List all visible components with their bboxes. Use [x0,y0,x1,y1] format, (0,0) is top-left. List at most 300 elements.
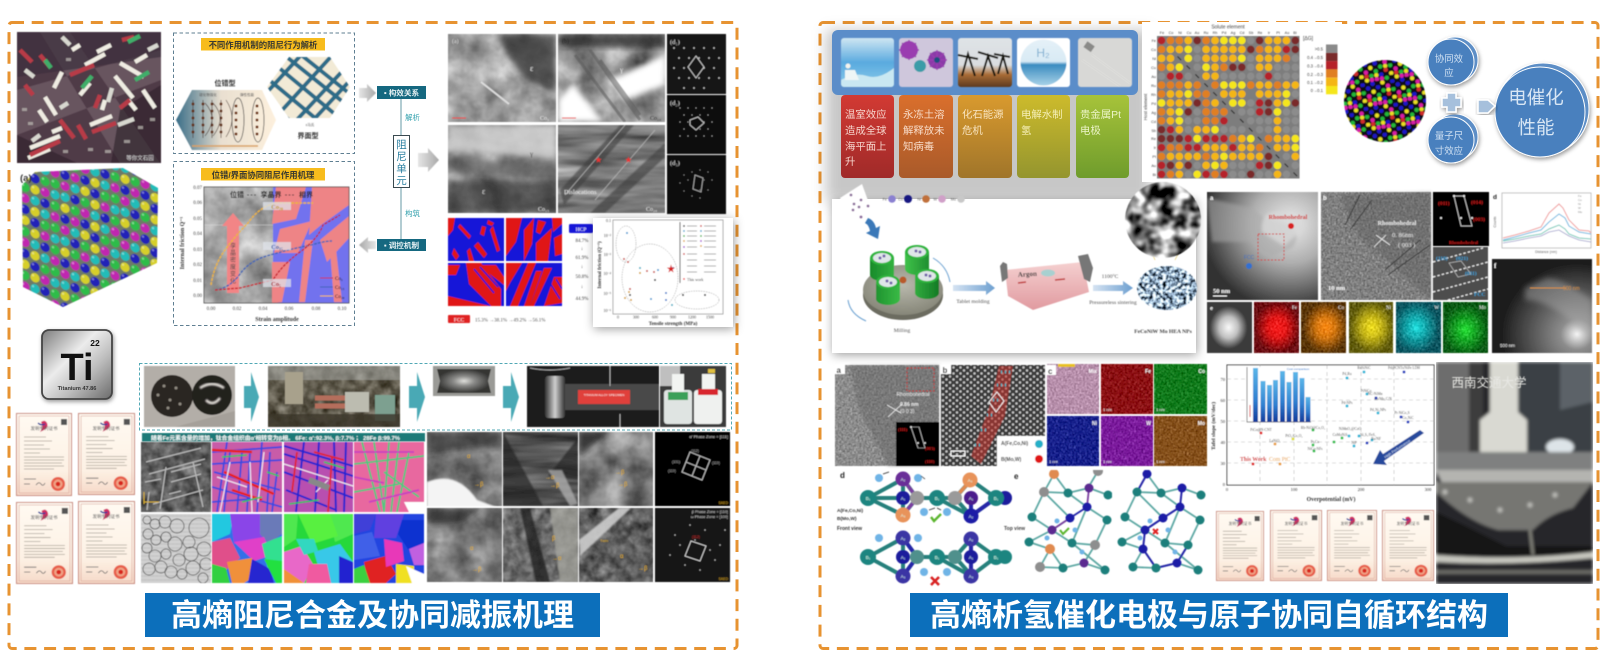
HRTEM b: Rhombohedral [1378,221,1417,227]
scatter chart: Tafel slope vs overpotential: 30 [1220,461,1226,466]
photo: hot rolling machine [268,366,400,427]
incorrect configuration: A₁ [901,555,906,560]
HRTEM a lower: (0 0 3) [900,409,915,415]
diagram: dislocation hexagon [176,78,276,150]
HCP legend: ↓ [581,247,583,252]
heatmap: segregation energy matrix: Ni [1152,57,1156,61]
SAED inset: (110) [925,459,935,464]
EBSD grains 2 [284,514,353,583]
heatmap legend: 0.4→0.5 [1307,55,1324,60]
HCP legend: 50.8% [576,275,588,280]
line chart: internal friction vs strain [180,186,349,323]
scatter chart: Tafel slope vs overpotential: PtNiCo [1361,389,1372,393]
TEM image 2 [503,432,578,506]
STEM f: 500 nm [1500,343,1515,348]
card: water electrolysis: 电解水制 [1021,108,1063,121]
diagram: interface hexagon [267,56,350,140]
panel label a: (a) [20,173,32,184]
heatmap: segregation energy matrix: Fe [1152,39,1156,43]
card: fossil energy: 危机 [962,124,983,137]
diffraction d2: (d₂) [670,100,680,107]
mapping W: W [1146,421,1151,427]
HAADF b lower: b [942,366,948,375]
caption bar: Fe content and phase [142,433,425,442]
EDS Ni: Ni [1386,306,1392,311]
diagram d: front view molecular structures: d [840,471,845,480]
line chart: internal friction vs strain: 晶 [230,250,236,257]
image: hydrogen globe: H₂ [1036,46,1050,60]
HRTEM a lower: 0.86 nm [900,402,919,408]
HCP legend: 84.7% [576,239,588,244]
scatter chart: Tafel slope vs overpotential: 50 [1220,419,1226,424]
certificate 6: 发明专利证书 [1285,521,1308,526]
card: fossil energy: 化石能源 [962,108,1004,121]
photo: traffic jam [17,32,161,163]
certificate 2: 发明专利证书 [92,425,120,432]
scatter chart: friction vs tensile strength: ★ [666,264,676,274]
SAED c top: (003) [1473,216,1485,223]
scatter chart: friction vs tensile strength: 10⁻⁶ [603,308,612,313]
SAED 1: (112) [691,449,699,453]
scatter chart: Tafel slope vs overpotential: Overpotential (mV) [1307,496,1355,503]
line chart: internal friction vs strain: 0.08 [312,307,321,312]
heatmap: segregation energy matrix: Pt [1152,155,1157,159]
sintered porous disc: FeCoNiW Mo HEA NPs [1134,329,1193,335]
sintered porous disc [1134,250,1197,335]
arrow: process step 1 [244,372,259,422]
incorrect configuration: A₁ [969,555,974,560]
patent certificates left [16,413,134,584]
HRTEM b: b [1323,196,1327,202]
certificate 3 [17,502,72,584]
bubble: synergy effect [1428,37,1478,85]
certificate 2 [79,413,134,495]
scatter chart: Tafel slope vs overpotential: 60 [1220,398,1226,403]
scatter chart: Tafel slope vs overpotential: This Work [1240,457,1267,463]
heading: damping behaviour: 不同作用机制的阻尼行为解析 [209,40,318,50]
heatmap: segregation energy matrix: Re [1151,137,1156,141]
line chart: internal friction vs strain: 0.01 [193,279,202,284]
micrograph d: ★ [595,156,602,164]
ball mill [848,245,950,334]
incorrect configuration: B₁ [994,555,999,560]
arrow: sintering: Pressureless sintering [1089,300,1137,306]
card: precious Pt: 贵金属Pt [1080,108,1121,121]
SEM porous circle [1125,182,1201,258]
SAED inset: (003) [925,446,935,451]
powder packet [840,184,870,221]
phase map 4 [506,263,562,306]
heatmap legend: 0.3→0.4 [1307,64,1324,68]
card: greenhouse effect: 升 [845,156,855,168]
heatmap legend: 0→0.1 [1311,88,1324,93]
scatter chart: Tafel slope vs overpotential: Pt₃Cu [1311,440,1319,444]
photo: polished plate [433,366,495,396]
panel: synergy to electrocatalysis [1428,37,1589,163]
line chart: internal friction vs strain: 0.02 [233,307,242,312]
SAED 2 [655,508,730,582]
diagram: interface hexagon: 界面型 [298,131,318,140]
heatmap: segregation energy matrix [1143,24,1338,178]
scatter chart: Tafel slope vs overpotential: NiP [1351,441,1357,445]
heatmap: segregation energy matrix: Cd [1151,120,1156,124]
heatmap: segregation energy matrix: Bi [1153,173,1156,177]
line chart: internal friction vs strain: 0.10 [338,307,347,312]
mapping W: 1 nm [1103,459,1113,464]
arrow: from control mechanism [359,237,376,253]
EBSD and SEM microstructure grid [141,432,730,583]
micrograph b [558,34,665,122]
heatmap: segregation energy matrix: Ag [1151,111,1156,115]
correct configuration: A₂ [969,514,974,519]
diagram d: front view molecular structures: A(Fe,Co,Ni) [837,508,864,514]
mapping Fe: 1 nm [1103,407,1113,412]
EDS e HAADF [1207,302,1252,353]
line scan d: W [1578,206,1581,210]
EDS e HAADF: e [1210,306,1213,312]
diagram d: front view molecular structures: B(Mo,W) [837,516,857,522]
icon: titanium element tile: Ti [60,347,94,389]
SAED 1: α′ Phase Zone = [111] [689,434,728,439]
scatter chart: Tafel slope vs overpotential: Ru/NF [1371,437,1381,441]
certificate 7: 发明专利证书 [1341,521,1364,526]
scatter chart: Tafel slope vs overpotential: RuSiNiC [1357,366,1371,370]
heatmap: segregation energy matrix: Re [1258,31,1262,35]
diagram e: top view lattices: Top view [1004,526,1025,532]
bubble: electrocatalytic performance: 性能 [1517,117,1555,138]
mapping Ni: Ni [1092,421,1098,427]
mapping Fe: Fe [1145,369,1151,375]
FCC legend: FCC [454,318,465,324]
line chart: internal friction vs strain: 0.06 [285,307,294,312]
mapping Mo [1154,416,1207,466]
arrow: sintering: 1100°C [1102,273,1119,280]
heatmap: segregation energy matrix: Sb [1151,129,1156,133]
SAED c top: (011) [1438,200,1450,207]
correct configuration: A₃ [901,513,906,518]
arrow: tablet molding [953,281,995,305]
line scan d: Ni [1578,202,1581,206]
micrograph c: Co₁₅ [538,207,549,213]
heading: synergy mechanism [201,168,325,180]
incorrect configuration: A₂ [969,537,974,542]
scatter chart: Tafel slope vs overpotential: Co/Mo₂C/N [1374,397,1392,401]
scatter chart: friction vs tensile strength: 600 [652,314,658,320]
line scan d: d [1493,194,1497,201]
TEM micrographs grid [448,34,726,214]
heatmap: segregation energy matrix: Cu [1187,31,1191,35]
line chart: internal friction vs strain: 0.07 [193,186,202,191]
heatmap legend: >0.5 [1315,46,1324,52]
label: structure-property: ▪ 构效关系 [384,88,419,98]
HCP legend: 44.9% [576,297,588,302]
line scan d: Counts [1493,216,1497,228]
image: oil pumps [958,38,1012,87]
HCP legend: ↓ [581,265,583,270]
line chart: internal friction vs strain: Co₁₅ [335,286,345,291]
scatter chart: Tafel slope vs overpotential: 70 [1220,377,1226,382]
heatmap: segregation energy matrix: Co [1169,31,1173,35]
card: permafrost: 知病毒 [903,140,934,153]
icon: plus [1442,93,1461,112]
TEM image 2: →β [550,483,560,489]
scatter chart: friction vs tensile strength: 900 [670,314,676,320]
TEM image 5: →α [552,556,562,562]
scatter chart: Tafel slope vs overpotential: 40 [1220,440,1226,445]
heatmap: segregation energy matrix: Ni [1178,31,1182,35]
SAED c bottom: (021) [1456,255,1468,262]
EDS W: W [1434,306,1439,311]
STEM f [1492,259,1592,353]
STEM f: f [1494,262,1497,270]
mapping mix: c [1048,367,1053,376]
scatter chart: friction vs tensile strength: 10⁻⁵ [603,291,612,296]
heatmap: segregation energy matrix: Sb [1249,31,1253,35]
scatter chart: friction vs tensile strength: 1200 [688,314,696,320]
micrograph a: Co₅ [540,116,549,122]
image: iceberg [841,38,894,87]
image: hydrogen globe [1017,38,1070,87]
arrow: to structure-property relation [359,84,376,102]
SEM lath [141,442,211,512]
line chart: internal friction vs strain: Co₅ [335,277,343,282]
line chart: internal friction vs strain: 位错 [230,190,244,199]
line chart: internal friction vs strain: Co₅ [271,281,281,288]
certificate 4: 发明专利证书 [92,513,120,520]
heatmap: segregation energy matrix: Pd [1151,102,1156,106]
diffraction d3: (d₃) [670,160,680,167]
diffraction d1: (d₁) [670,39,680,46]
SAED 1 [655,432,730,506]
heatmap: segregation energy matrix: Host element [1143,93,1148,120]
EDS W [1396,302,1441,353]
incorrect configuration: A₂ [901,536,906,541]
scatter chart: friction vs tensile strength: 10⁻⁴ [603,271,612,276]
heatmap: segregation energy matrix: Au [1195,31,1199,35]
line chart: internal friction vs strain: 化 [230,277,236,285]
box: damping unit: 阻 [396,139,407,151]
SAED c bottom: FCC [1474,292,1485,298]
scatter chart: Tafel slope vs overpotential: NiMnO₂@CoO [1339,427,1362,431]
line scan d: Fe [1578,194,1582,198]
heatmap: segregation energy matrix: Rh [1213,31,1217,35]
SAED 1: (110) [712,461,720,465]
scatter chart: Tafel slope vs overpotential: 100 [1291,487,1298,492]
legend A B [997,436,1045,466]
card: precious Pt: 电极 [1080,124,1101,137]
element balls legend: W [933,198,937,202]
atom lattice cube [20,168,158,307]
box: damping unit [394,136,410,188]
furnace: Argon [1018,270,1037,279]
scatter chart: friction vs tensile strength: This work [687,277,703,282]
scatter chart: Tafel slope vs overpotential: Co₃NiC [1402,416,1414,420]
blue image strip [832,30,1138,95]
heatmap: segregation energy matrix: Fe [1160,31,1164,35]
TEM a: 50 nm [1213,288,1231,295]
line chart: internal friction vs strain: 0.02 [193,263,202,268]
certificate 3: 发明专利证书 [30,514,58,521]
micrograph b: Co₁₀ [650,116,661,122]
patent certificates right [1216,510,1434,581]
mapping Co: 1 nm [1156,407,1166,412]
left section frame [9,22,737,648]
incorrect configuration: B₁ [866,555,871,560]
scatter chart: friction vs tensile strength: 0.1 [606,218,611,223]
line chart: internal friction vs strain: 0.05 [193,217,202,222]
lattice correct [1024,466,1112,574]
incorrect configuration: A₃ [901,574,906,579]
FCC legend [448,315,545,324]
image: platinum electrode [1078,38,1132,87]
HRTEM a lower [835,365,939,466]
TEM image 3: →β [615,470,625,476]
title banner left: 高熵阻尼合金及协同减振机理 [171,598,574,633]
box: damping unit: 单 [396,163,407,175]
TEM image 4: →β [472,567,482,573]
TEM image 4 [427,508,502,582]
heading: synergy mechanism: 位错/界面协同阻尼作用机理 [212,170,315,180]
phase map 1 [448,218,504,261]
line chart: internal friction vs strain: 0.00 [207,307,216,312]
EBSD lath 2 [284,442,353,512]
scatter chart: Tafel slope vs overpotential: Pd-NPs [1342,401,1353,405]
EDS Mo [1443,302,1488,353]
atomic-resolution row [835,364,1207,466]
HAADF b lower [941,365,1045,466]
label: structure-property [377,86,426,99]
card: greenhouse effect: 温室效应 [845,108,887,121]
mapping Fe [1101,364,1153,414]
SAED 2: ω Phase Zone = [100] [691,515,728,519]
TEM row: →β [474,482,484,488]
HRTEM b: 0. 86nm [1392,232,1413,239]
bubble: electrocatalytic performance [1495,63,1589,157]
high-entropy nanoparticle [1344,60,1426,142]
panel: synthesis process [832,182,1201,353]
line chart: internal friction vs strain: Co₂₀ [335,295,345,300]
heatmap: segregation energy matrix: Co [1151,48,1156,52]
scatter chart: Tafel slope vs overpotential: Pd@CNTs/NiFe LDH [1388,366,1420,370]
scatter chart: Tafel slope vs overpotential: Pt-NiCo₂S [1394,411,1410,415]
label: analyse: 解析 [405,113,420,122]
certificate 4 [79,502,134,584]
TEM image 5 [503,508,578,582]
correct configuration: B₁ [994,496,999,501]
scatter chart: friction vs tensile strength: 1500 [706,314,714,320]
micrograph c [448,125,556,213]
scatter chart: friction vs tensile strength: 0 [617,314,619,320]
EBSD lath 1 [212,442,282,512]
card: permafrost: 永冻土溶 [903,108,945,121]
TEM image 3 [579,432,653,506]
SAED 1: (110) [668,469,676,473]
micrograph d: ★ [625,156,632,164]
mapping Co: Co [1198,369,1205,375]
line chart: internal friction vs strain: 0.03 [193,248,202,253]
phase map 2 [506,218,562,261]
HRTEM b [1321,192,1431,300]
photo: reagent bottles [660,366,726,427]
mapping mix [1047,364,1099,414]
mapping Ni: 1 nm [1049,459,1059,464]
scatter chart: Tafel slope vs overpotential: Rh-NiO@Co₃O₄ [1301,426,1326,430]
box: damping unit: 元 [396,175,407,187]
HRTEM b: 10 nm [1328,285,1346,292]
micrograph c: ε [482,187,486,196]
SAED c bottom [1433,247,1488,300]
TEM a [1207,192,1318,300]
TEM image 6: →β [638,566,648,572]
SAED c top: (014) [1471,199,1483,206]
TEM row [427,432,502,509]
micrograph a: ε [530,64,534,73]
SAED 2: SAED [718,577,728,581]
bubble: quantum size effect: 量子尺 [1435,130,1463,141]
heatmap: segregation energy matrix: Cu [1151,66,1156,70]
diffraction d3 [667,155,726,214]
scatter chart: Tafel slope vs overpotential: Com PtC [1269,457,1291,463]
micrograph d: Co₂₀ [646,207,657,213]
diagram e: top view lattices [1004,466,1206,574]
FCC legend: 15.3% →38.1% →49.2% →56.1% [475,318,545,324]
arrow: sintering [1089,273,1137,306]
certificate 7 [1327,510,1377,581]
heatmap: segregation energy matrix: Pd [1222,31,1226,35]
HRTEM a lower: Rhombohedral [897,392,929,398]
scatter chart: Tafel slope vs overpotential: 0 [1223,482,1226,487]
micrograph a: (a) [452,38,459,45]
bubble: electrocatalytic performance: 电催化 [1508,87,1564,108]
lattice incorrect [1118,470,1206,574]
heatmap: segregation energy matrix: Solute element [1211,24,1245,30]
heatmap legend: 0.2→0.3 [1307,72,1324,77]
micrograph d [558,125,665,213]
arrow: process step 3 [503,372,519,422]
icon: titanium element tile: Titanium 47.86 [58,386,96,392]
arrow: to performance [1478,100,1495,113]
HRTEM b: ( 003 ) [1398,242,1415,249]
TEM a: FCC [1244,255,1255,261]
heatmap: segregation energy matrix: Bi [1293,31,1297,35]
arrow: to micrographs [418,148,439,172]
HRTEM a lower: a [836,366,842,375]
mapping Mo: Mo [1198,421,1205,427]
diagram d: front view molecular structures: Front view [837,526,862,532]
arrow: tablet molding: Tablet molding [956,299,990,305]
scatter chart: friction vs tensile strength: Tensile strength (MPa) [649,322,698,327]
SAED 1: SAED [718,501,728,505]
correct configuration: B₁ [866,496,871,501]
mapping Ni [1047,416,1099,466]
card: water electrolysis: 氢 [1021,124,1032,137]
label: construct: 构筑 [405,209,420,218]
arrow: process step 2 [409,372,425,422]
bubble: quantum size effect [1428,114,1478,163]
EDS Fe: Fe [1292,306,1298,311]
heatmap: segregation energy matrix: Pt [1276,31,1281,35]
panel: synergistic damping mechanism chart [174,162,354,326]
element balls legend: Fe [883,198,887,202]
incorrect configuration: A₃ [969,574,974,579]
mapping Mo: 1 nm [1156,459,1166,464]
TEM a: Rhombohedral [1269,215,1308,221]
micrograph a [448,34,556,122]
TEM image 2: →α [545,475,555,481]
photo: hydrogen evolution electrode in water [1436,362,1593,584]
line chart: internal friction vs strain: 0.04 [193,232,202,237]
scatter chart: Tafel slope vs overpotential: 200 [1358,487,1365,492]
